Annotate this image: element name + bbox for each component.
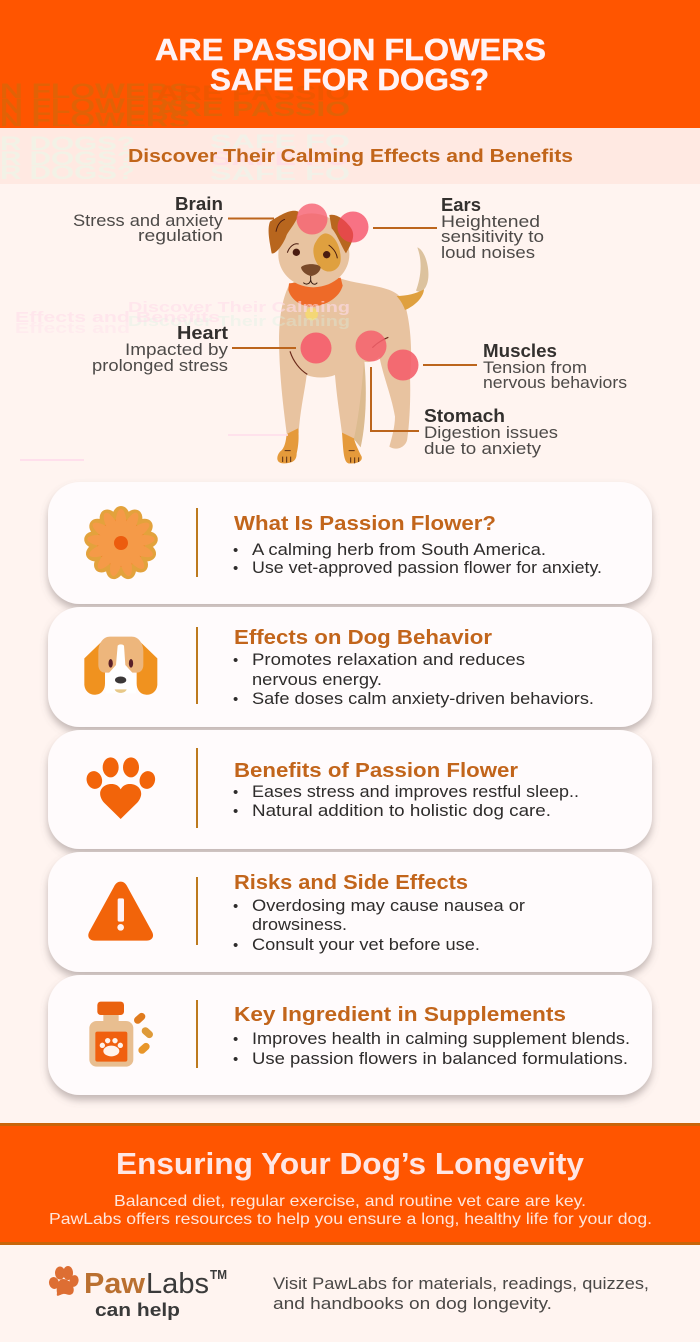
subtitle band: SAFE FO	[210, 132, 350, 153]
callout: heart: prolonged stress	[92, 357, 228, 375]
header banner: N FLOWERS	[0, 109, 190, 132]
bullets: drowsiness.	[252, 916, 347, 934]
footer text: Balanced diet, regular exercise, and routine vet care are key.	[114, 1193, 586, 1210]
callout: stomach: Digestion issues	[424, 424, 558, 442]
icon: paw with heart	[84, 757, 157, 819]
panel: what is passion flower	[48, 482, 652, 604]
subtitle band: R DOGS?	[0, 134, 135, 155]
bullets: Use vet-approved passion flower for anxiety.	[252, 559, 602, 577]
nose and mouth	[301, 264, 321, 276]
paws	[277, 428, 299, 463]
callout: muscles: Tension from	[483, 359, 587, 377]
title: SAFE FOR DOGS?	[210, 63, 489, 97]
footer text: PawLabs offers resources to help you ensure a long, healthy life for your dog.	[49, 1211, 652, 1228]
panel: benefits of passion flower	[48, 730, 652, 849]
footer heading: Ensuring Your Dog’s Longevity	[116, 1146, 585, 1181]
subtitle band	[0, 128, 700, 185]
title: ARE PASSION FLOWERS	[155, 33, 546, 67]
bullets: A calming herb from South America.	[252, 541, 546, 559]
callout: heart: Heart	[177, 323, 228, 343]
bullets: Promotes relaxation and reduces	[252, 651, 525, 669]
text: Discover Their Calming	[128, 313, 350, 330]
subtitle band: R DOGS?	[0, 149, 135, 170]
bullets: •	[233, 652, 238, 669]
dog illustration	[269, 211, 428, 464]
callout: muscles	[423, 341, 627, 392]
text block: visit PawLabs: and handbooks on dog longevity.	[273, 1294, 552, 1313]
bullets: •	[233, 1051, 238, 1068]
eyes	[293, 249, 300, 256]
header banner: ARE PASSIO	[156, 82, 350, 105]
heading: What Is Passion Flower?	[234, 512, 496, 535]
title	[155, 33, 546, 97]
bullets: •	[233, 784, 238, 801]
chest lines	[290, 337, 388, 374]
text block: visit PawLabs: Visit PawLabs for materials, readings, quizzes,	[273, 1274, 649, 1293]
callout: ears	[373, 195, 544, 262]
bullets: Overdosing may cause nausea or	[252, 897, 526, 915]
icon: supplement bottle	[89, 1002, 154, 1067]
footer text	[49, 1193, 652, 1228]
eye patch	[313, 233, 341, 272]
bullets: •	[233, 898, 238, 915]
callout: heart: Impacted by	[125, 341, 229, 359]
icon: warning triangle	[88, 882, 153, 941]
bullets: Eases stress and improves restful sleep..	[252, 783, 579, 801]
bullets: •	[233, 803, 238, 820]
callout: ears: sensitivity to	[441, 228, 544, 246]
subtitle band: R DOGS?	[0, 163, 135, 184]
logo: PawLabs can help: can help	[95, 1299, 180, 1320]
subtitle band: SAFE FO	[210, 149, 350, 170]
icon: dog face	[84, 637, 157, 695]
collar	[288, 278, 343, 307]
logo: PawLabs can help: Labs	[146, 1268, 209, 1300]
heading: Benefits of Passion Flower	[234, 759, 518, 782]
bullets: •	[233, 937, 238, 954]
bullets: Natural addition to holistic dog care.	[252, 802, 551, 820]
bullets	[233, 651, 594, 708]
callout: stomach: Stomach	[424, 406, 505, 426]
logo: PawLabs can help: Paw	[84, 1268, 145, 1300]
icon: flower	[83, 506, 159, 581]
callout: ears: Ears	[441, 195, 481, 215]
text: Discover Their Calming	[128, 299, 350, 316]
panel: effects on dog behavior	[48, 607, 652, 727]
hotspot: heart	[300, 332, 332, 364]
heading: Effects on Dog Behavior	[234, 626, 492, 649]
ears	[269, 211, 298, 254]
head	[278, 213, 349, 287]
callout: brain: Brain	[175, 194, 223, 214]
callout: stomach: due to anxiety	[424, 440, 542, 458]
header banner	[0, 0, 700, 132]
bullets	[233, 1030, 630, 1068]
text: Effects and	[15, 320, 130, 337]
bullets: Safe doses calm anxiety-driven behaviors.	[252, 690, 594, 708]
bullets	[233, 783, 579, 820]
tag	[305, 308, 318, 320]
hotspot: stomach	[356, 330, 386, 362]
tail	[416, 247, 428, 292]
bullets: Improves health in calming supplement blends.	[252, 1030, 630, 1048]
callout: brain: Stress and anxiety	[73, 212, 224, 230]
callout: brain: regulation	[138, 227, 223, 245]
bullets: •	[233, 542, 238, 559]
callout: muscles: nervous behaviors	[483, 374, 627, 392]
header banner: N FLOWERS	[0, 95, 190, 118]
heading: Key Ingredient in Supplements	[234, 1003, 566, 1026]
hotspot: brain	[296, 204, 328, 234]
callout: ears: Heightened	[441, 213, 540, 231]
callout: ears: loud noises	[441, 244, 535, 262]
bullets: nervous energy.	[252, 671, 382, 689]
panel: risks and side effects	[48, 852, 652, 972]
panel: key ingredient in supplements	[48, 975, 652, 1095]
subtitle band: SAFE FO	[210, 164, 350, 185]
callout: muscles: Muscles	[483, 341, 557, 361]
logo: PawLabs can help	[48, 1266, 227, 1320]
hotspot: ear	[338, 212, 368, 242]
bullets	[233, 541, 602, 577]
header banner: ARE PASSIO	[156, 98, 350, 121]
footer banner: longevity	[0, 1123, 700, 1245]
bullets: •	[233, 560, 238, 577]
text: Effects and Benefits	[15, 309, 220, 326]
bullets: Consult your vet before use.	[252, 936, 480, 954]
logo: PawLabs can help: TM	[210, 1267, 227, 1282]
callout: stomach	[371, 367, 558, 458]
header banner: N FLOWERS	[0, 80, 190, 103]
callout: brain	[73, 194, 274, 245]
body	[279, 270, 411, 449]
bullets: •	[233, 1031, 238, 1048]
hotspot: muscles	[388, 350, 418, 380]
heading: Risks and Side Effects	[234, 871, 468, 894]
text block: visit PawLabs	[273, 1274, 649, 1313]
bullets: •	[233, 691, 238, 708]
bullets	[233, 897, 526, 954]
icon: logo paw	[48, 1266, 80, 1296]
tail base	[397, 289, 424, 310]
subtitle band: Discover Their Calming Effects and Benefits	[128, 145, 573, 166]
bullets: Use passion flowers in balanced formulations.	[252, 1050, 628, 1068]
far hind leg	[353, 358, 366, 447]
callout: heart	[92, 323, 296, 375]
